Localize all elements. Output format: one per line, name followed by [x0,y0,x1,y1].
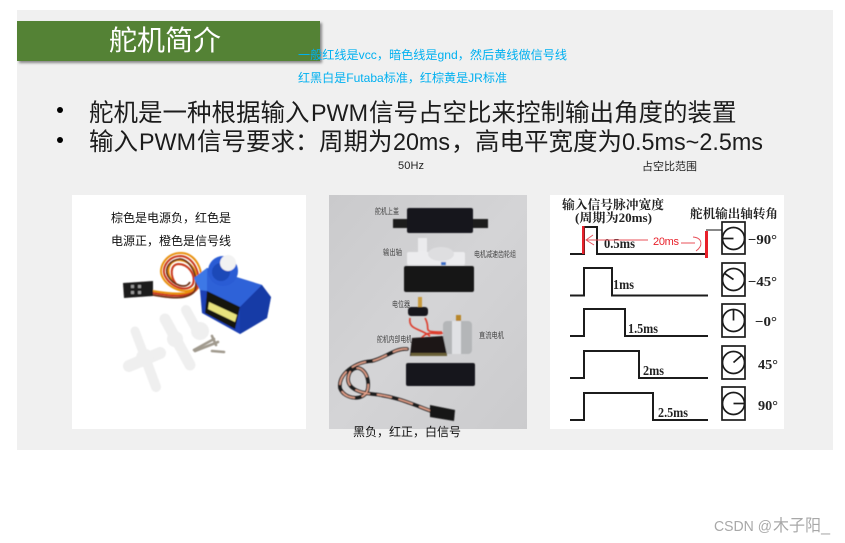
pulse width labels: 0.5ms [604,236,635,251]
note: wire colours [298,47,567,85]
icon: screws [194,336,224,352]
angle labels: 45° [758,358,778,373]
title banner: 舵机简介 [109,25,221,56]
note: 50Hz: 50Hz [398,160,424,172]
part labels: 直流电机 [479,330,504,340]
panel: PWM to angle chart [550,195,784,429]
bullet list: 输入 [89,128,138,156]
chart headers: (周期为20ms) [575,210,652,225]
icon: cable and connector [340,349,431,411]
watermark: 木子阳_ [773,516,831,535]
angle labels: −0° [755,315,777,330]
part labels: 输出轴 [383,247,402,257]
bullet list [57,99,763,156]
bullet list: 舵机是一种根据输入 [89,99,310,127]
note: duty cycle range: 占空比范围 [642,159,697,173]
icon: servo illustration [123,253,271,387]
bullet list: 信号要求： [197,128,320,156]
note: wire colours of servo [111,210,231,248]
title banner [17,21,322,63]
note: wire colours of servo: 电源正，橙色是信号线 [111,233,231,248]
angle labels: −45° [748,275,777,290]
note: cable colours: 黑负，红正，白信号 [353,424,461,439]
part labels: 舵机内部电机 [377,334,412,344]
bullet list: PWM [139,129,196,156]
icon: disassembled servo parts [340,208,488,421]
bullet list: 周期为 [319,128,392,156]
panel: servo photo [72,195,306,429]
bullet list: 0.5ms~2.5ms [622,129,763,156]
bullet list: 信号占空比来控制输出角度的装置 [369,99,736,127]
part labels: 电位器 [392,299,410,309]
pulse width labels [604,236,688,420]
pulse waveforms [570,227,708,420]
chart headers [562,197,778,225]
part labels: 舵机上盖 [375,206,399,216]
chart headers: 舵机输出轴转角 [690,206,778,221]
pulse width labels: 2ms [643,363,664,378]
slide background [17,10,833,450]
pulse width labels: 1.5ms [628,321,658,336]
annotation: 20ms period: 20ms [653,236,680,248]
icon: servo horns [129,310,198,387]
bullet list: 高电平宽度为 [475,128,622,156]
note: wire colours of servo: 棕色是电源负，红色是 [111,210,231,225]
output angle dials [722,222,745,420]
bullet list: 20ms [393,129,450,156]
panel: servo disassembly photo [329,195,527,429]
part labels: 电机减速齿轮组 [474,249,516,259]
angle labels: −90° [748,233,777,248]
bullet list: ， [451,129,476,156]
annotation: 20ms period [582,226,722,258]
watermark: CSDN @ [714,518,772,535]
pulse width labels: 2.5ms [658,405,688,420]
watermark [714,516,831,535]
angle labels: 90° [758,399,778,414]
pulse width labels: 1ms [613,277,634,292]
note: wire colours: 一般红线是vcc，暗色线是gnd，然后黄线做信号线 [298,47,567,62]
bullet list: PWM [311,100,368,127]
note: wire colours: 红黑白是Futaba标准，红棕黄是JR标准 [298,70,507,85]
part labels [375,206,516,344]
angle labels [748,233,778,414]
chart headers: 输入信号脉冲宽度 [562,197,664,212]
